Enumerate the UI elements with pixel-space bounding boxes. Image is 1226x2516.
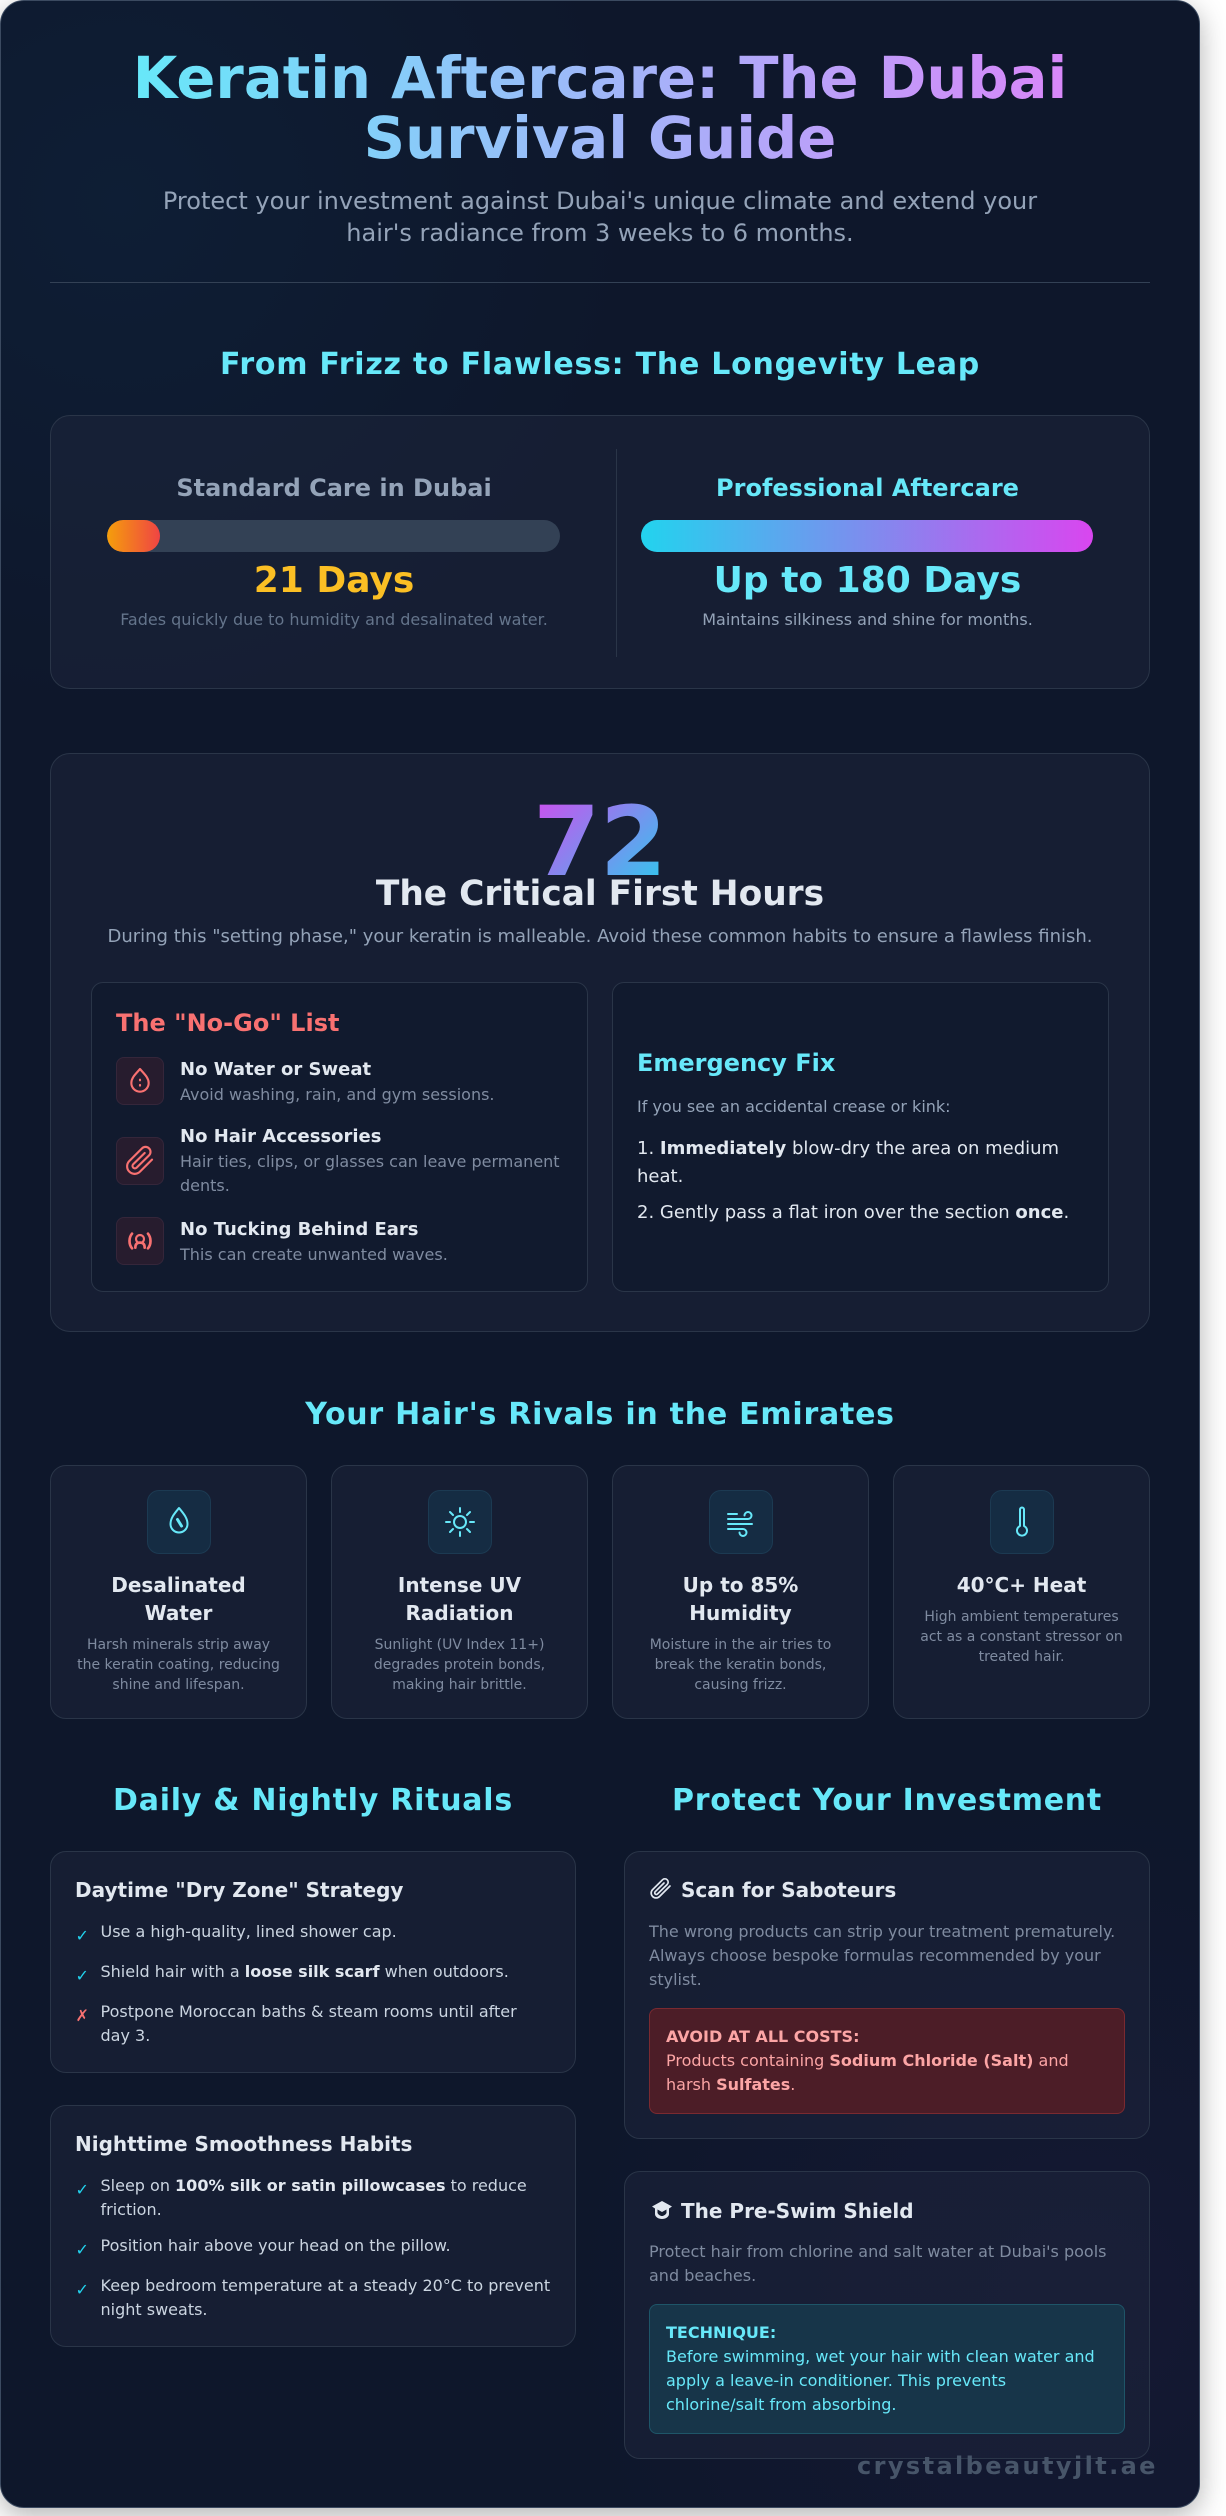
heading: rivals: Your Hair's Rivals in the Emirates <box>305 1397 895 1432</box>
description: treated hair. <box>979 1649 1064 1665</box>
description <box>77 1637 280 1693</box>
note: professional aftercare: Maintains silkiness and shine for months. <box>702 610 1033 629</box>
callout: technique <box>649 2304 1125 2434</box>
check mark: ✓ <box>76 1926 89 1945</box>
panel: pre-swim shield <box>624 2171 1150 2459</box>
icon: paperclip outline <box>650 1878 671 1899</box>
big number 72: 72 <box>533 786 667 898</box>
description: making hair brittle. <box>392 1677 527 1693</box>
description <box>920 1609 1123 1665</box>
title: pre-swim: The Pre-Swim Shield <box>681 2199 914 2223</box>
list item: Use a high-quality, lined shower cap. <box>100 1922 397 1941</box>
list item: Postpone Moroccan baths & steam rooms until after <box>100 2002 517 2021</box>
title <box>111 1573 246 1625</box>
icon: paperclip <box>116 1137 164 1185</box>
title: Humidity <box>689 1601 792 1625</box>
list item: night sweats. <box>100 2300 208 2319</box>
card: heat <box>893 1465 1150 1719</box>
check mark: ✓ <box>76 2240 89 2259</box>
step 1: 1. Immediately blow-dry the area on medium <box>637 1138 1059 1159</box>
title: Keratin Aftercare: The Dubai <box>133 45 1067 112</box>
icon: sun <box>428 1490 492 1554</box>
text: saboteurs: stylist. <box>649 1970 702 1989</box>
list item: Position hair above your head on the pillow. <box>100 2236 451 2255</box>
description: causing frizz. <box>694 1677 787 1693</box>
value: 180 days: Up to 180 Days <box>714 560 1021 601</box>
heading: emergency fix: Emergency Fix <box>637 1049 835 1077</box>
callout text: technique: apply a leave-in conditioner. This prevents <box>666 2371 1006 2390</box>
check mark: ✓ <box>76 2180 89 2199</box>
description: shine and lifespan. <box>112 1677 245 1693</box>
description <box>650 1637 831 1693</box>
title: saboteurs: Scan for Saboteurs <box>681 1878 896 1902</box>
description <box>374 1637 545 1693</box>
heading: no-go: The "No-Go" List <box>116 1009 339 1037</box>
item title: tucking: No Tucking Behind Ears <box>180 1219 418 1240</box>
title: daytime: Daytime "Dry Zone" Strategy <box>75 1878 403 1902</box>
description: the keratin coating, reducing <box>77 1657 280 1673</box>
list item: day 3. <box>100 2026 150 2045</box>
item text: tucking: This can create unwanted waves. <box>180 1245 448 1264</box>
list item: Shield hair with a loose silk scarf when outdoors. <box>100 1962 509 1981</box>
subtitle: hair's radiance from 3 weeks to 6 months. <box>346 219 854 247</box>
item text: accessories <box>180 1152 560 1195</box>
card: uv radiation <box>331 1465 588 1719</box>
panel: no-go list <box>91 982 588 1292</box>
text: pre-swim: and beaches. <box>649 2266 756 2285</box>
list item: Sleep on 100% silk or satin pillowcases to reduce <box>100 2176 527 2195</box>
text: crease: If you see an accidental crease or kink: <box>637 1097 951 1116</box>
cross mark: ✗ <box>76 2006 89 2025</box>
callout text: technique: TECHNIQUE: <box>666 2323 776 2342</box>
item text: accessories: dents. <box>180 1176 230 1195</box>
step 1 <box>637 1138 1059 1187</box>
panel: emergency fix <box>612 982 1109 1292</box>
title <box>398 1573 521 1625</box>
note: standard care: Fades quickly due to humidity and desalinated water. <box>120 610 548 629</box>
item title: water: No Water or Sweat <box>180 1059 371 1080</box>
icon: wind <box>709 1490 773 1554</box>
card: desalinated water <box>50 1465 307 1719</box>
callout text: technique: chlorine/salt from absorbing. <box>666 2395 896 2414</box>
list item: friction. <box>100 2200 162 2219</box>
callout text: technique: Before swimming, wet your hair with clean water and <box>666 2347 1095 2366</box>
list item <box>100 2002 517 2045</box>
title <box>683 1573 798 1625</box>
callout text: avoid: AVOID AT ALL COSTS: <box>666 2027 859 2046</box>
title <box>0 49 1200 169</box>
description: act as a constant stressor on <box>920 1629 1123 1645</box>
callout: avoid <box>649 2008 1125 2114</box>
list item <box>100 2176 527 2219</box>
icon: ears <box>116 1217 164 1265</box>
title: 40°C+ Heat <box>957 1573 1086 1597</box>
heading: longevity: From Frizz to Flawless: The Longevity Leap <box>220 347 980 382</box>
step 2: 2. Gently pass a flat iron over the section once. <box>637 1202 1069 1223</box>
value: 21 days: 21 Days <box>254 560 414 601</box>
heading: critical hours: The Critical First Hours <box>376 874 824 914</box>
bar: professional aftercare <box>641 520 1093 552</box>
heading: rituals: Daily & Nightly Rituals <box>113 1783 513 1818</box>
panel: longevity comparison <box>50 415 1150 689</box>
callout text: avoid <box>666 2027 1069 2094</box>
description: Harsh minerals strip away <box>87 1637 270 1653</box>
intro text: During this "setting phase," your keratin is malleable. Avoid these common habits to ensure a flawless finish. <box>107 926 1093 947</box>
text: saboteurs: Always choose bespoke formulas recommended by your <box>649 1946 1101 1965</box>
text: pre-swim: Protect hair from chlorine and salt water at Dubai's pools <box>649 2242 1106 2261</box>
description: Sunlight (UV Index 11+) <box>375 1637 544 1653</box>
description: Moisture in the air tries to <box>650 1637 831 1653</box>
title: Intense UV <box>398 1573 521 1597</box>
panel: daytime strategy <box>50 1851 576 2073</box>
heading: protect: Protect Your Investment <box>672 1783 1102 1818</box>
text: saboteurs <box>648 1922 1115 1989</box>
step 1: heat. <box>637 1166 683 1187</box>
description: break the keratin bonds, <box>655 1657 826 1673</box>
item text: accessories: Hair ties, clips, or glasses can leave permanent <box>180 1152 560 1171</box>
list item: Keep bedroom temperature at a steady 20°C to prevent <box>100 2276 550 2295</box>
icon: water drop <box>116 1057 164 1105</box>
check mark: ✓ <box>76 2280 89 2299</box>
list item <box>100 2276 550 2319</box>
comparison divider <box>616 449 617 657</box>
description: High ambient temperatures <box>924 1609 1119 1625</box>
text: pre-swim <box>649 2242 1106 2285</box>
panel: nighttime habits <box>50 2105 576 2347</box>
subtitle: Protect your investment against Dubai's unique climate and extend your <box>163 187 1037 215</box>
description: degrades protein bonds, <box>374 1657 545 1673</box>
check mark: ✓ <box>76 1966 89 1985</box>
callout text: avoid: harsh Sulfates. <box>666 2075 795 2094</box>
callout text: technique <box>666 2323 1095 2414</box>
title: Radiation <box>406 1601 513 1625</box>
icon: drop <box>147 1490 211 1554</box>
watermark: crystalbeautyjlt.ae <box>857 2452 1158 2480</box>
callout text: avoid: Products containing Sodium Chloride (Salt) and <box>666 2051 1069 2070</box>
title: Up to 85% <box>683 1573 798 1597</box>
card: humidity <box>612 1465 869 1719</box>
label: professional aftercare: Professional Aftercare <box>716 474 1019 502</box>
icon: graduation cap <box>652 2201 672 2219</box>
panel: critical first hours <box>50 753 1150 1332</box>
bar: standard care <box>107 520 560 552</box>
title: Survival Guide <box>364 105 836 172</box>
text: saboteurs: The wrong products can strip your treatment prematurely. <box>649 1922 1115 1941</box>
item text: water: Avoid washing, rain, and gym sessions. <box>180 1085 495 1104</box>
title: Water <box>145 1601 212 1625</box>
title: nighttime: Nighttime Smoothness Habits <box>75 2132 412 2156</box>
subtitle <box>163 187 1038 247</box>
label: standard care: Standard Care in Dubai <box>176 474 492 502</box>
icon: thermometer <box>990 1490 1054 1554</box>
item title: accessories: No Hair Accessories <box>180 1126 381 1147</box>
panel: scan for saboteurs <box>624 1851 1150 2139</box>
title: Desalinated <box>111 1573 246 1597</box>
